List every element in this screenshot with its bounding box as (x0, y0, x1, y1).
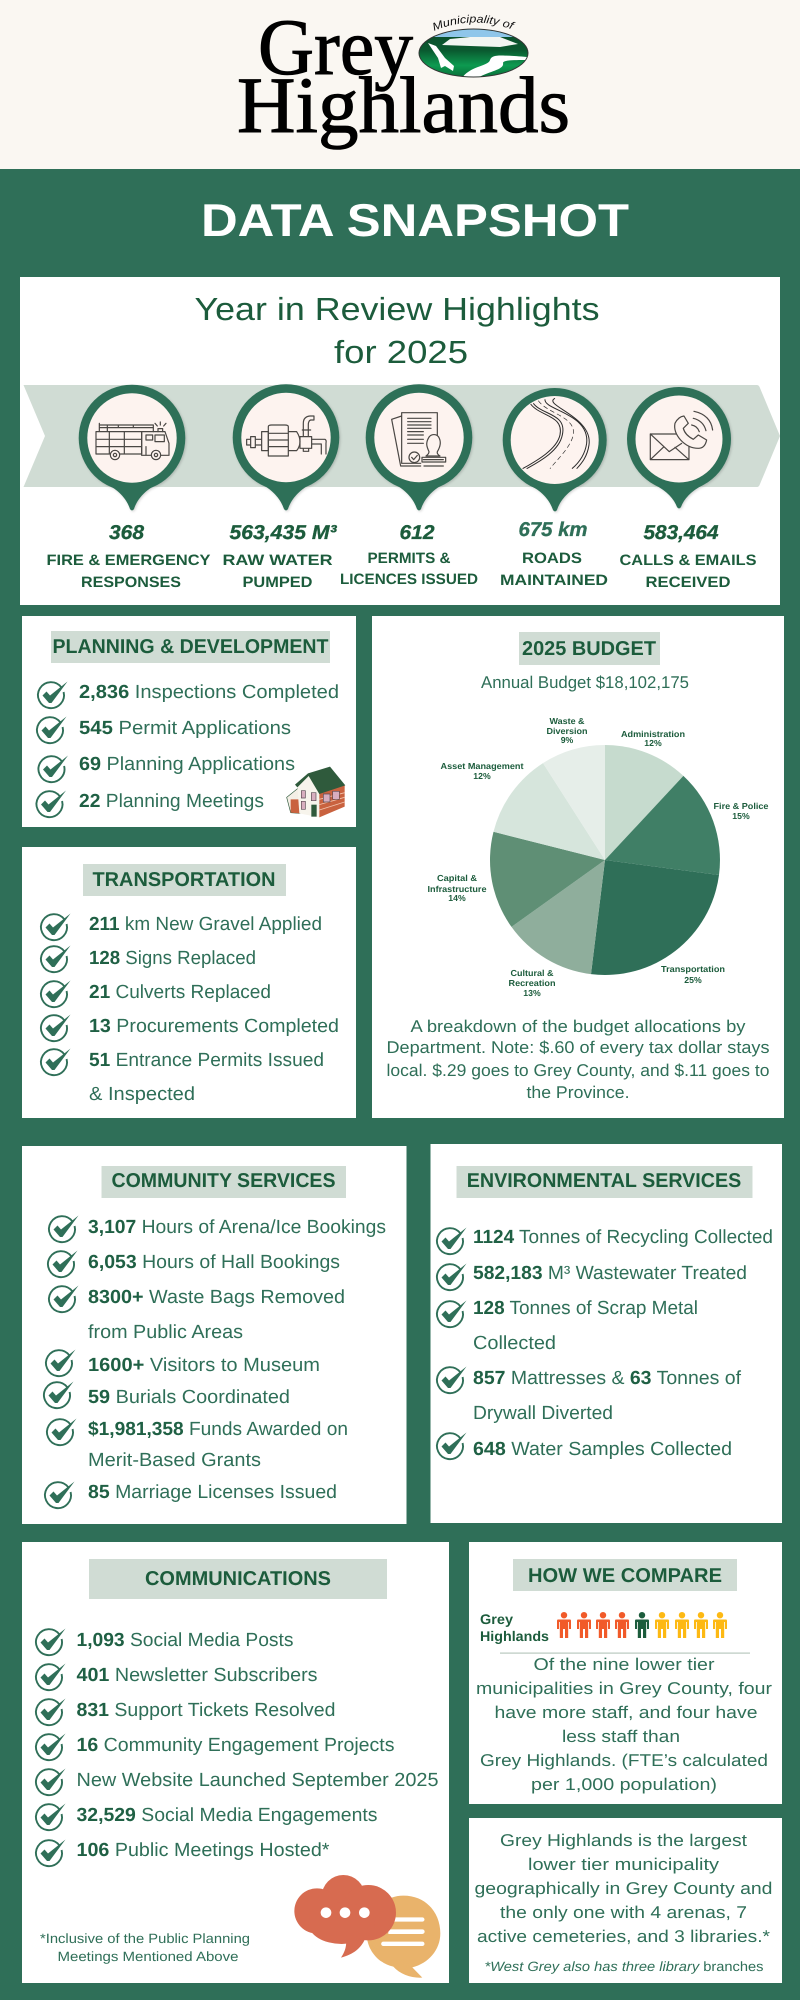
pie label: capital and infrastructure: Infrastructure (428, 884, 487, 894)
footnote: public meetings: Meetings Mentioned Above (58, 1949, 239, 1964)
item: scrap metal (437, 1298, 698, 1354)
pie label: cultural and recreation: 13% (523, 988, 541, 998)
panel: environmental services (430, 1144, 782, 1523)
heading: communications: COMMUNICATIONS (145, 1568, 331, 1590)
pie label: administration: 12% (644, 738, 662, 748)
pie label: capital and infrastructure: 14% (448, 893, 466, 903)
heading: environmental services (456, 1166, 752, 1198)
item: mattresses and drywall: Drywall Diverted (473, 1403, 613, 1424)
item: new website (36, 1768, 439, 1795)
heading: environmental services: ENVIRONMENTAL SERVICES (467, 1170, 741, 1192)
item: museum visitors: 1600+ Visitors to Museum (88, 1355, 320, 1376)
item: gravel (41, 914, 322, 940)
heading: 2025 budget (519, 632, 660, 665)
panel: largest municipality note (469, 1818, 782, 1983)
item: support tickets (36, 1698, 336, 1725)
stat: raw water pumped (222, 522, 338, 591)
heading: how we compare: HOW WE COMPARE (528, 1565, 722, 1587)
item: planning meetings (36, 790, 264, 817)
item: museum visitors (46, 1350, 320, 1376)
annual budget total: Annual Budget $18,102,175 (481, 673, 689, 692)
item: culverts (41, 980, 271, 1007)
footnote: library branches: *West Grey also has three library branches (484, 1959, 764, 1974)
pie label: transportation (661, 964, 725, 985)
item: planning applications: 69 Planning Applications (79, 754, 295, 775)
item: social posts (36, 1628, 294, 1655)
note text: Grey Highlands is the largest (500, 1831, 747, 1850)
logo emblem oval (418, 28, 530, 78)
item: marriage licenses (45, 1482, 337, 1508)
item: burials (44, 1382, 290, 1408)
heading: transportation (83, 864, 286, 896)
item: recycling: 1124 Tonnes of Recycling Collected (473, 1227, 773, 1248)
arrow band (24, 385, 780, 487)
item: new website: New Website Launched September 2025 (76, 1770, 438, 1791)
pie label: fire and police: Fire & Police (714, 801, 769, 811)
stat: permits and licences (340, 522, 478, 588)
pie label: fire and police: 15% (732, 811, 750, 821)
stat: calls and emails: RECEIVED (646, 574, 731, 591)
pie label: asset management: Asset Management (440, 761, 524, 771)
panel: communications (22, 1542, 449, 1983)
stat: fire responses: 368 (109, 522, 145, 544)
heading: how we compare (513, 1559, 737, 1591)
pie label: waste and diversion: 9% (561, 735, 574, 745)
item: signs: 128 Signs Replaced (89, 948, 256, 969)
item: waste bags: 8300+ Waste Bags Removed (88, 1287, 345, 1308)
item: gravel: 211 km New Gravel Applied (89, 914, 322, 935)
item: mattresses and drywall (437, 1366, 742, 1424)
pin: envelope and phone icon (627, 387, 731, 508)
logo arc text: Municipality of (433, 14, 516, 31)
comparison text: municipalities in Grey County, four (476, 1679, 772, 1698)
pie chart (490, 745, 720, 975)
heading: 2025 budget: 2025 BUDGET (522, 638, 656, 660)
comparison text: less staff than (562, 1727, 680, 1746)
panel: 2025 budget (372, 616, 784, 1118)
pie label: cultural and recreation (508, 968, 556, 998)
footnote: public meetings: *Inclusive of the Public Planning (40, 1931, 250, 1946)
pie label: administration (621, 729, 685, 748)
stat: permits and licences: LICENCES ISSUED (340, 571, 478, 588)
stat: roads maintained: MAINTAINED (500, 572, 608, 589)
pie label: waste and diversion (546, 716, 588, 745)
stat: roads maintained: ROADS (522, 550, 582, 567)
item: social posts: 1,093 Social Media Posts (76, 1630, 294, 1651)
pie label: transportation: 25% (684, 975, 702, 985)
item: engagement projects: 16 Community Engagement Projects (76, 1735, 395, 1756)
stat: permits and licences: PERMITS & (368, 550, 451, 567)
label: Grey Highlands: Highlands (480, 1628, 549, 1644)
logo wordmark: Grey: Grey (258, 4, 413, 92)
logo wordmark: Highlands: Highlands (237, 62, 570, 150)
budget description: local. $.29 goes to Grey County, and $.11 goes to (386, 1061, 770, 1080)
item: permit applications: 545 Permit Applications (79, 718, 291, 739)
pie label: capital and infrastructure: Capital & (437, 873, 477, 883)
stat: calls and emails: CALLS & EMAILS (620, 552, 756, 569)
item: procurements (41, 1014, 339, 1041)
item: wastewater: 582,183 M³ Wastewater Treated (473, 1263, 747, 1284)
budget description (386, 1017, 770, 1102)
item: water samples (437, 1432, 732, 1460)
pie label: asset management (440, 761, 524, 781)
item: scrap metal: Collected (473, 1333, 556, 1354)
note text: lower tier municipality (528, 1855, 720, 1874)
stat: raw water pumped: RAW WATER (222, 552, 333, 569)
pie label: fire and police (714, 801, 769, 821)
icon: speech bubbles (294, 1875, 440, 1978)
stat: permits and licences: 612 (400, 522, 434, 544)
item: scrap metal: 128 Tonnes of Scrap Metal (473, 1298, 698, 1319)
item: hall bookings (48, 1250, 340, 1277)
panel: transportation (22, 847, 356, 1118)
title: DATA SNAPSHOT (201, 194, 629, 246)
stat: roads maintained (500, 519, 608, 589)
item: social engagements (36, 1804, 378, 1830)
note text: the only one with 4 arenas, 7 (500, 1903, 747, 1922)
item: entrance permits (41, 1048, 324, 1105)
label: Grey Highlands: Grey (480, 1611, 513, 1627)
item: planning applications (38, 754, 295, 782)
pie label: cultural and recreation: Recreation (508, 978, 556, 988)
item: grants (47, 1418, 348, 1471)
heading: year in review: Year in Review Highlights (194, 291, 600, 327)
pictogram: nine municipalities staff (557, 1612, 727, 1638)
stat: fire responses: RESPONSES (81, 574, 181, 591)
heading: transportation: TRANSPORTATION (92, 869, 276, 891)
comparison text: Of the nine lower tier (534, 1655, 715, 1674)
pie label: cultural and recreation: Cultural & (510, 968, 554, 978)
pie label: transportation: Transportation (661, 964, 725, 974)
item: recycling (437, 1227, 773, 1254)
pie label: waste and diversion: Diversion (546, 726, 588, 736)
heading: planning and development: PLANNING & DEVELOPMENT (52, 636, 328, 658)
item: social engagements: 32,529 Social Media Engagements (76, 1805, 378, 1826)
item: water samples: 648 Water Samples Collected (473, 1439, 732, 1460)
heading: year in review: for 2025 (334, 334, 468, 370)
item: public meetings (36, 1840, 330, 1866)
stat: calls and emails (620, 522, 756, 591)
stat: calls and emails: 583,464 (644, 522, 718, 544)
item: public meetings: 106 Public Meetings Hosted* (76, 1840, 330, 1861)
item: entrance permits: 51 Entrance Permits Issued (89, 1050, 324, 1071)
heading: community services: COMMUNITY SERVICES (112, 1170, 336, 1192)
stat: raw water pumped: PUMPED (242, 574, 313, 591)
item: permit applications (37, 716, 291, 743)
item: newsletter (36, 1664, 318, 1690)
pie label: administration: Administration (621, 729, 685, 739)
item: waste bags (49, 1286, 345, 1343)
heading: communications (89, 1559, 387, 1599)
panel: planning and development (22, 616, 356, 827)
pie label: waste and diversion: Waste & (550, 716, 584, 726)
icon: house (287, 767, 345, 817)
item: procurements: 13 Procurements Completed (89, 1016, 339, 1037)
item: newsletter: 401 Newsletter Subscribers (76, 1665, 318, 1686)
stat: raw water pumped: 563,435 M³ (230, 522, 338, 544)
panel: community services (22, 1146, 406, 1524)
comparison text: per 1,000 population) (531, 1775, 717, 1794)
item: grants: Merit-Based Grants (88, 1450, 261, 1471)
note text: geographically in Grey County and (474, 1879, 772, 1898)
comparison text (476, 1655, 772, 1794)
panel: year in review highlights (20, 277, 780, 605)
heading: community services (102, 1166, 346, 1198)
pie label: capital and infrastructure (428, 873, 487, 903)
note text (474, 1831, 772, 1946)
stat: fire responses: FIRE & EMERGENCY (46, 552, 210, 569)
footnote: public meetings (40, 1931, 250, 1964)
pin: permits document icon (366, 384, 472, 510)
item: planning meetings: 22 Planning Meetings (79, 791, 264, 812)
item: entrance permits: & Inspected (89, 1084, 195, 1105)
note text: active cemeteries, and 3 libraries.* (477, 1927, 770, 1946)
budget description: Department. Note: $.60 of every tax dollar stays (386, 1038, 770, 1057)
stat: fire responses (46, 522, 210, 591)
item: engagement projects (36, 1734, 395, 1760)
item: inspections (38, 682, 339, 708)
pin: fire truck icon (79, 385, 185, 510)
item: burials: 59 Burials Coordinated (88, 1387, 290, 1408)
item: culverts: 21 Culverts Replaced (89, 982, 271, 1003)
item: signs (41, 946, 256, 972)
comparison text: have more staff, and four have (494, 1703, 758, 1722)
budget description: A breakdown of the budget allocations by (410, 1017, 746, 1036)
item: grants: $1,981,358 Funds Awarded on (88, 1419, 348, 1440)
item: waste bags: from Public Areas (88, 1322, 243, 1343)
item: support tickets: 831 Support Tickets Resolved (76, 1700, 336, 1721)
item: inspections: 2,836 Inspections Completed (79, 682, 339, 703)
item: hall bookings: 6,053 Hours of Hall Bookings (88, 1252, 340, 1273)
budget description: the Province. (526, 1083, 630, 1102)
pie label: asset management: 12% (473, 771, 491, 781)
pin: winding road icon (503, 388, 607, 512)
label: Grey Highlands (480, 1611, 549, 1644)
item: arena bookings: 3,107 Hours of Arena/Ice Bookings (88, 1217, 386, 1238)
heading: year in review (194, 291, 600, 370)
item: marriage licenses: 85 Marriage Licenses Issued (88, 1482, 337, 1503)
header band with logo (0, 0, 800, 169)
stat: roads maintained: 675 km (518, 519, 588, 541)
pin: water pump icon (233, 384, 339, 510)
panel: how we compare (469, 1542, 782, 1804)
comparison text: Grey Highlands. (FTE’s calculated (480, 1751, 768, 1770)
item: wastewater (437, 1263, 747, 1290)
item: arena bookings (49, 1216, 386, 1242)
heading: planning and development (51, 631, 330, 663)
item: mattresses and drywall: 857 Mattresses & 63 Tonnes of (473, 1368, 742, 1389)
